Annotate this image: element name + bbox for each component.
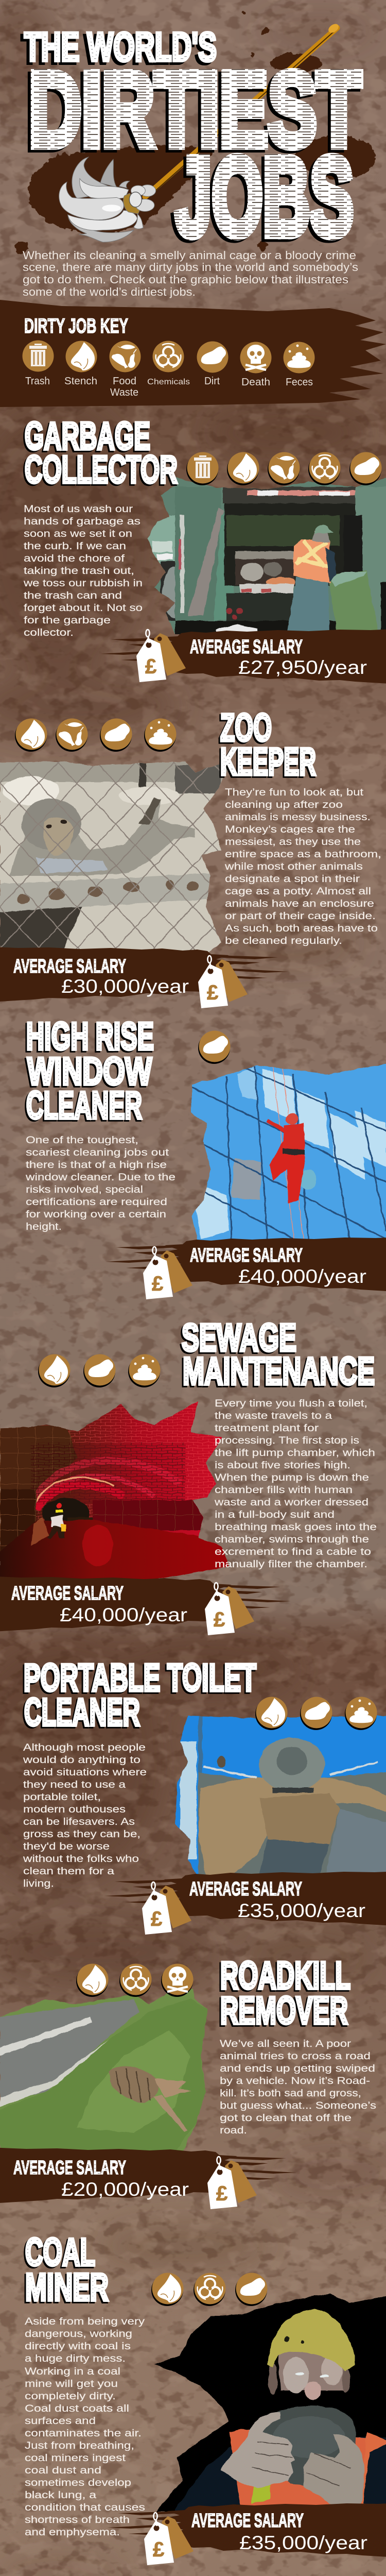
body text: without the folks who [23,1854,139,1865]
body text: modern outhouses [23,1804,126,1815]
body text: Coal dust coats all [25,2403,129,2414]
body text: forget about it. Not so [24,603,143,614]
body text: coal dust and [25,2465,101,2476]
icon: trash: Trash [25,376,50,387]
icon: price tag [198,956,248,1008]
body text: collector. [24,628,74,638]
heading: dirty job key: DIRTY JOB KEY [24,315,128,337]
heading: coal miner: COAL [25,2230,95,2274]
icon: feces: Feces [286,377,313,388]
body text: Although most people [23,1742,146,1753]
intro paragraph: scene, there are many dirty jobs in the world and somebody’s [23,261,358,274]
body text: Most of us wash our [24,504,133,515]
body text: designate a spot in their [225,874,360,885]
body text: portable toilet, [23,1792,101,1803]
heading: average salary: AVERAGE SALARY [13,956,126,977]
icon: price tag [143,1247,192,1299]
icon: food waste: Food [113,376,136,387]
body text: dangerous, working [25,2329,132,2340]
heading: average salary: AVERAGE SALARY [189,1878,302,1900]
body text: contaminates the air. [25,2428,142,2439]
icon: chemicals: Chemicals [147,378,190,386]
body text: animals is messy business. [225,812,371,823]
heading: average salary: AVERAGE SALARY [190,636,303,658]
body text: entire space as a bathroom, [225,849,381,860]
body text: messiest, as they use the [225,837,361,848]
heading: high rise window cleaner: HIGH RISE [26,1014,154,1058]
icon: price tag: £ [207,981,218,1004]
salary amount: £35,000/year [239,2532,367,2553]
body text: the trash can and [24,590,122,601]
dirt icons [15,718,176,752]
photo: garbage truck [144,474,386,639]
body text: cage as a potty. Almost all [225,886,371,897]
heading: average salary: AVERAGE SALARY [11,1583,124,1604]
body text: One of the toughest, [26,1135,138,1146]
header illustration: mud splats [15,9,376,254]
body text: height. [26,1222,62,1232]
heading: zoo keeper [220,706,316,783]
panel: garbage collector [23,414,386,685]
heading: average salary: AVERAGE SALARY [190,1245,303,1266]
body text: cleaning up after zoo [225,800,343,810]
icon: price tag [205,1583,254,1635]
panel: portable toilet cleaner [23,1656,386,1935]
salary amount: £35,000/year [238,1900,365,1921]
icon: price tag: £ [216,2182,227,2205]
body text: avoid the chore of [24,553,125,564]
icon: stench [64,341,97,387]
body text: while most other animals [224,861,363,872]
icon: price tag: £ [214,1608,225,1631]
heading: portable toilet cleaner: CLEANER [24,1690,140,1734]
icon: dirt: Dirt [204,376,220,387]
body text: kill. It’s both sad and gross, [220,2088,361,2099]
salary band [108,2502,386,2558]
body text: taking the trash out, [24,566,134,577]
salary amount: £27,950/year [238,657,367,678]
title: THE WORLD'S [24,24,217,70]
body text: When the pump is down the [215,1472,369,1483]
body text: clean them for a [23,1866,115,1877]
photo: monkey behind fence [0,757,237,958]
body text: and emphysema. [25,2527,120,2538]
body text: processing. The first stop is [215,1435,359,1446]
heading: garbage collector: COLLECTOR [25,448,178,491]
icon: price tag [136,630,186,682]
heading: roadkill remover [220,1954,350,2032]
body text: be cleaned regularly. [225,936,342,946]
body text: hands of garbage as [24,516,141,527]
heading: zoo keeper: KEEPER [220,740,316,783]
salary band [0,946,288,1003]
body text [214,1398,377,1570]
body text: window cleaner. Due to the [25,1172,176,1183]
body text: condition that causes [25,2502,145,2513]
panel: sewage maintenance [0,1316,377,1635]
icon: price tag: £ [152,1273,163,1295]
panel: roadkill remover [0,1954,376,2209]
body text: certifications are required [26,1197,167,1208]
heading: coal miner: MINER [25,2265,109,2309]
photo: dirty portable toilet [175,1713,386,1880]
panel: coal miner [25,2230,386,2565]
icon: food waste: Waste [110,387,138,398]
heading: garbage collector: GARBAGE [25,414,150,457]
body text: directly with coal is [25,2341,131,2352]
body text: but guess what... Someone’s [220,2100,376,2111]
body text: can be lifesavers. As [23,1817,135,1827]
salary amount: £40,000/year [60,1604,187,1625]
intro paragraph: got to do them. Check out the graphic below that illustrates [23,273,348,286]
dirt icons [186,452,382,485]
salary band [0,2147,296,2204]
body text: there is that of a high rise [26,1160,167,1171]
body text: by a vehicle. Now it’s Road- [220,2076,370,2087]
salary band [100,629,386,685]
intro paragraph: Whether its cleaning a smelly animal cage or a bloody crime [23,249,356,262]
body text: the curb. If we can [24,541,126,552]
body text: We’ve all seen it. A poor [220,2039,352,2049]
icon: feces [283,342,315,388]
mop handle [145,22,340,197]
body text: a huge dirty mess. [25,2353,126,2364]
body text: mine will get you [25,2379,118,2389]
heading: garbage collector [25,414,178,491]
salary amount: £40,000/year [238,1266,366,1287]
body text: would do anything to [23,1755,141,1766]
body text: breathing mask goes into the [215,1522,377,1533]
icon: price tag [142,1882,191,1935]
icon: chemicals [147,341,190,386]
icon: dirt [197,341,229,387]
body text: the waste travels to a [215,1411,332,1421]
title [24,24,361,259]
heading: portable toilet cleaner: PORTABLE TOILET [24,1656,256,1699]
body text: chamber, swims through the [215,1534,369,1545]
body text: Aside from being very [25,2316,145,2327]
icon: price tag [207,2157,257,2209]
icon: trash [23,340,54,387]
body text: living. [23,1878,54,1889]
body text: Monkey’s cages are the [225,824,355,835]
body text: waste and a worker dressed [214,1497,369,1508]
body text: avoid situations where [23,1767,147,1778]
panel: zoo keeper [0,706,381,1008]
intro paragraph [23,249,358,298]
dirt icons [151,2273,268,2306]
body text: gross as they can be, [23,1829,141,1840]
body text: chamber fills with human [215,1485,353,1496]
body text: animals have an enclosure [225,899,374,909]
panel: high rise window cleaner [25,1014,386,1299]
intro paragraph: some of the world’s dirtiest jobs. [23,285,196,298]
body text: shortness of breath [25,2515,130,2526]
icon: price tag: £ [153,2538,164,2561]
body text: or part of their cage inside. [225,911,376,922]
heading: sewage maintenance [182,1316,375,1393]
heading: high rise window cleaner: CLEANER [26,1083,142,1127]
body text: Every time you flush a toilet, [215,1398,367,1409]
salary amount: £30,000/year [61,976,189,997]
icon: mop head [59,157,156,242]
heading: zoo keeper: ZOO [220,706,272,749]
icon: dirt [198,1030,231,1064]
heading: sewage maintenance: SEWAGE [182,1316,296,1359]
body text: treatment plant for [215,1423,319,1434]
body text [25,1135,176,1232]
body text: surfaces and [25,2416,96,2427]
icon: price tag: £ [151,1908,162,1930]
heading: coal miner [25,2230,109,2309]
dirt icons [255,1697,377,1730]
salary amount: £20,000/year [61,2179,189,2200]
photo: red-lit sewer tunnel [0,1399,232,1582]
body text [23,1742,147,1889]
photo: miner holding coal [154,2293,386,2514]
icon: death: Death [241,377,270,388]
photo: armadillo on roadside [0,1989,211,2154]
icon: price tag: £ [145,655,156,678]
body text: they'd be worse [23,1841,110,1852]
body text [224,787,381,946]
body text: scariest cleaning jobs out [26,1147,169,1158]
body text: road. [220,2125,247,2136]
body text: sometimes develop [25,2478,131,2488]
salary band [104,1871,386,1927]
icon: price tag [144,2513,194,2565]
heading: average salary: AVERAGE SALARY [13,2157,126,2179]
body text: is about five stories high. [215,1460,350,1471]
body text: black lung, a [25,2490,97,2501]
body text: and ends up getting swiped [220,2063,375,2074]
heading: high rise window cleaner [26,1014,154,1127]
heading: average salary: AVERAGE SALARY [191,2510,304,2532]
heading: high rise window cleaner: WINDOW [27,1049,152,1093]
body text: risks involved, special [26,1184,143,1195]
body text: excrement to find a cable to [215,1547,371,1557]
photo: window cleaner on glass facade [190,1061,386,1247]
heading: portable toilet cleaner [24,1656,256,1734]
panel: dirty job key [0,300,386,407]
body text: They’re fun to look at, but [225,787,364,798]
body text: got to clean that off the [220,2113,352,2124]
body text: for working over a certain [26,1209,166,1220]
body text: completely dirty. [25,2391,116,2402]
salary band [106,1236,386,1293]
body text: we toss our rubbish in [23,578,143,589]
body text: the lift pump chamber, which [215,1448,375,1459]
body text: for the garbage [24,615,111,626]
body text: soon as we set it on [24,529,132,539]
body text: As such, both areas have to [225,923,378,934]
icon: stench: Stench [64,376,97,387]
dirt icons [76,1964,194,1997]
body text [23,504,143,638]
icon: death [240,342,272,388]
body text: Working in a coal [25,2366,120,2377]
icon: food waste [109,341,141,398]
body text: animal tries to cross a road [220,2051,371,2062]
body text: Just from breathing, [25,2441,134,2451]
body text: they need to use a [23,1780,126,1790]
salary band [0,1576,291,1632]
body text [25,2316,145,2538]
dirt icons [38,1354,161,1387]
body text [220,2039,376,2136]
body text: coal miners ingest [25,2453,126,2464]
body text: in a full-body suit and [215,1510,335,1520]
body text: manually filter the chamber. [215,1559,367,1570]
